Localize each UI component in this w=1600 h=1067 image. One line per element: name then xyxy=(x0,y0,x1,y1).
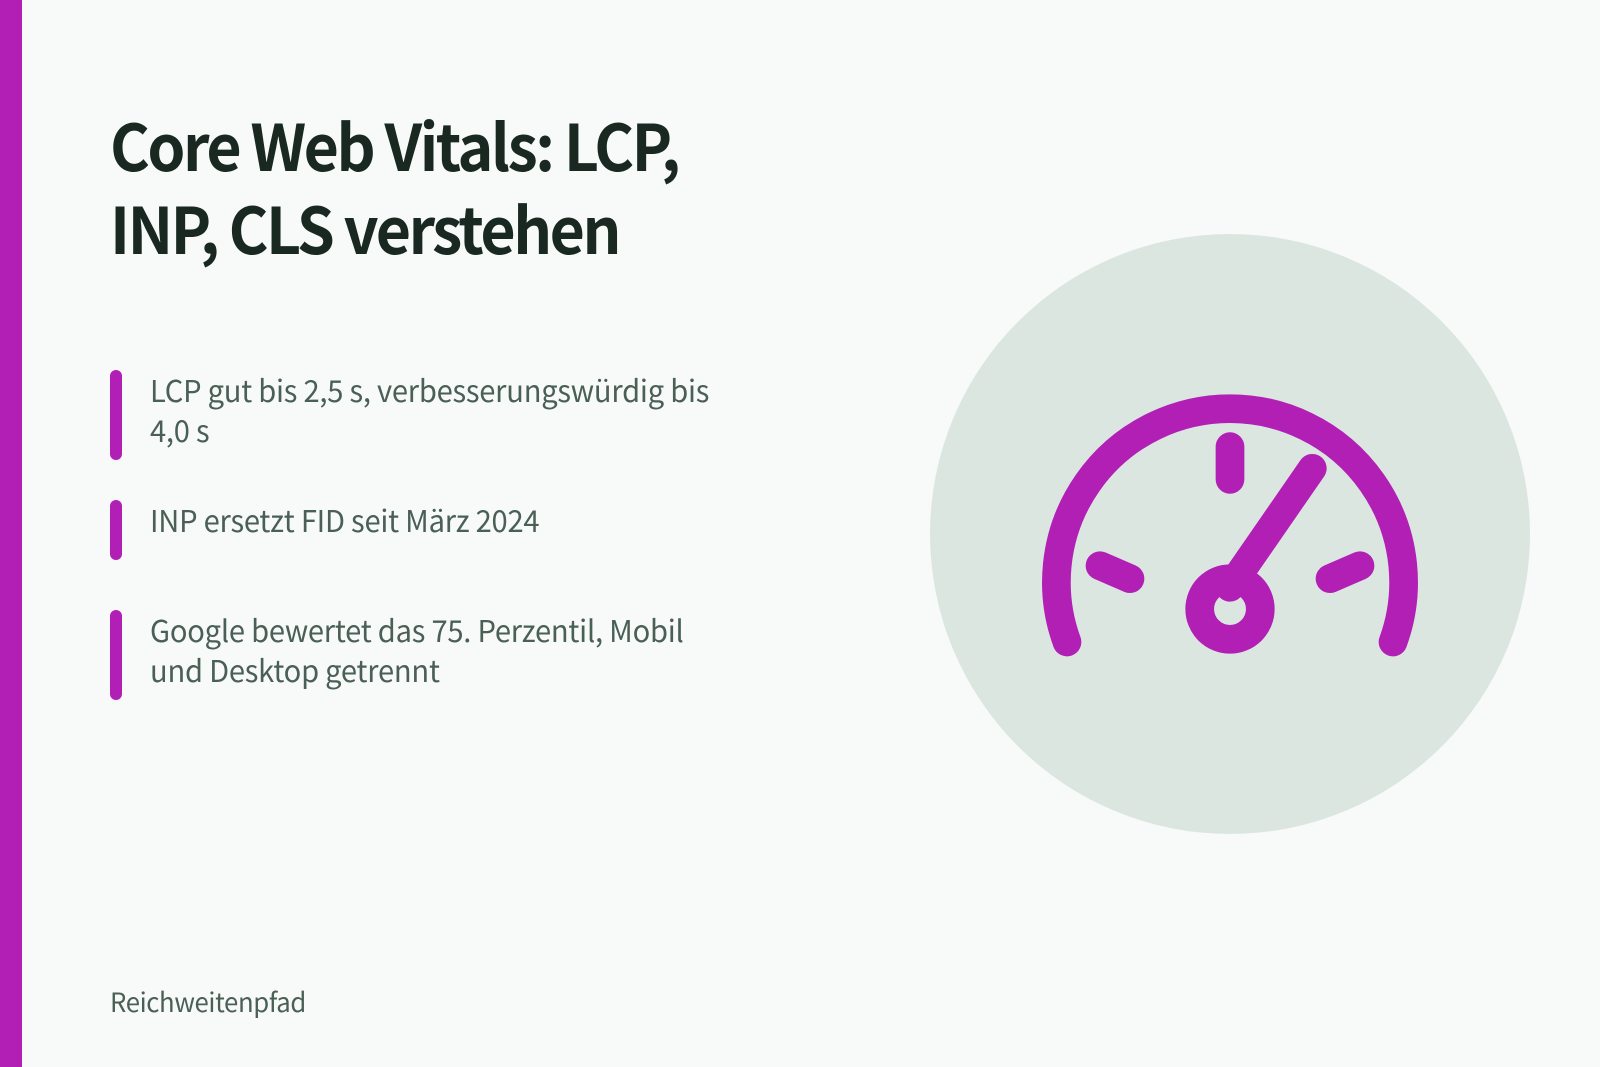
bullet text: 4,0 s xyxy=(150,407,209,451)
bullet: INP replaces FID xyxy=(110,497,539,560)
bullet: LCP thresholds xyxy=(110,367,709,460)
left accent bar xyxy=(0,0,22,1067)
bullet text xyxy=(150,607,684,691)
title: INP, CLS verstehen xyxy=(110,181,619,273)
bullet marker xyxy=(110,500,122,560)
title xyxy=(110,98,678,273)
bullet text: LCP gut bis 2,5 s, verbesserungswürdig bis xyxy=(150,367,709,411)
background circle xyxy=(930,234,1530,834)
bullet text: Google bewertet das 75. Perzentil, Mobil xyxy=(150,607,684,651)
bullet marker xyxy=(110,610,122,700)
bullet text: und Desktop getrennt xyxy=(150,647,440,691)
bullet text xyxy=(150,367,709,451)
bullet: 75th percentile xyxy=(110,607,684,700)
bullet marker xyxy=(110,370,122,460)
bullet text: INP ersetzt FID seit März 2024 xyxy=(150,497,539,541)
title: Core Web Vitals: LCP, xyxy=(110,98,678,190)
footer brand: Reichweitenpfad xyxy=(110,981,306,1020)
icon: speedometer gauge xyxy=(1056,409,1404,642)
